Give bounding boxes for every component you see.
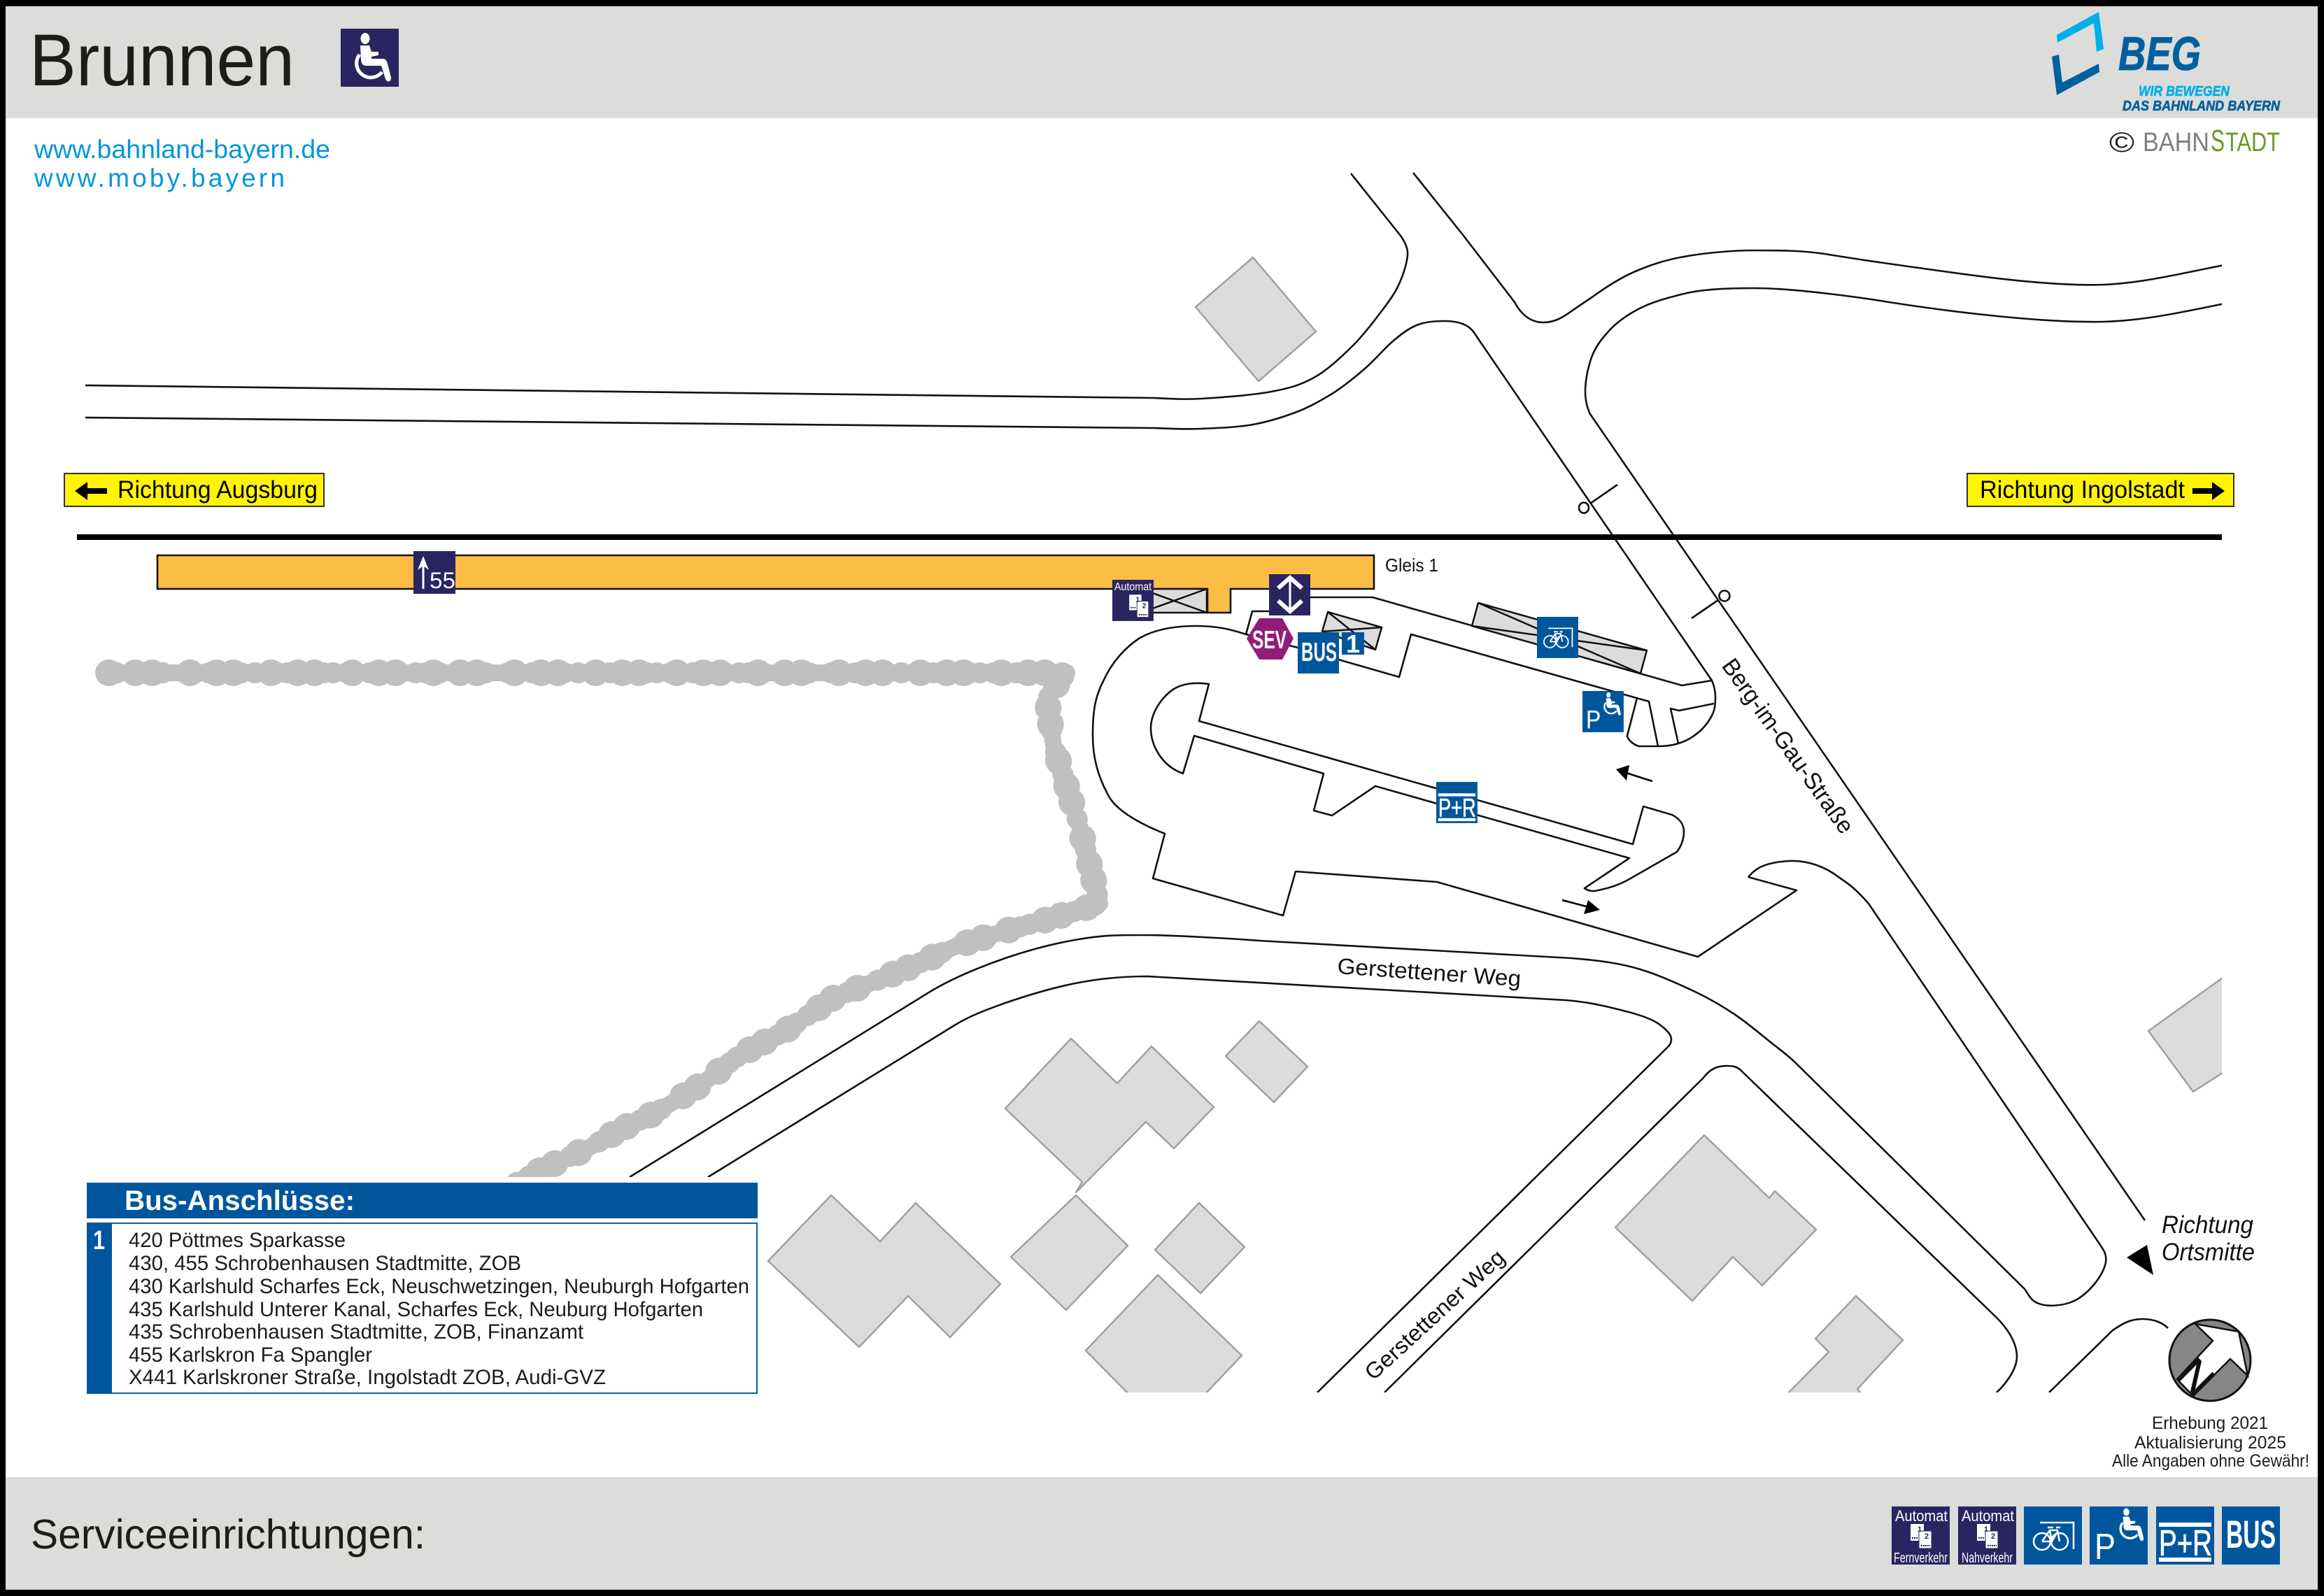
connection list: 1 <box>93 1226 105 1255</box>
sign: ticket machine: 2 <box>1142 603 1147 611</box>
sign: bike parking <box>1537 617 1578 658</box>
legend: park and ride: P+R <box>2159 1523 2212 1564</box>
survey note: Erhebung 2021 <box>2152 1413 2268 1433</box>
header band <box>6 6 2318 118</box>
logo: BEG <box>2052 12 2280 114</box>
title: Brunnen <box>29 20 295 101</box>
parking median island <box>1151 683 1684 891</box>
copyright BahnStadt: TADT <box>2225 128 2280 157</box>
connection list: 435 Schrobenhausen Stadtmitte, ZOB, Finanzamt <box>129 1320 584 1344</box>
legend: park and ride <box>2156 1506 2214 1565</box>
sign: platform length 55 <box>413 551 455 594</box>
legend: ticket machine local: 2 <box>1991 1532 1995 1541</box>
direction label: Richtung Ingolstadt <box>1967 473 2234 506</box>
roads <box>85 173 2225 1392</box>
bike shelter <box>1472 603 1647 674</box>
sign: SEV <box>1247 618 1294 660</box>
buildings <box>768 257 2225 1395</box>
legend: bike parking <box>2024 1506 2082 1565</box>
sign: SEV: SEV <box>1252 625 1287 654</box>
legend: ticket machine long distance: 1 <box>1918 1525 1922 1534</box>
logo: BEG: WIR BEWEGEN <box>2139 84 2230 99</box>
sign: ticket machine: Automat <box>1114 581 1152 593</box>
hedge <box>108 673 1100 1185</box>
map <box>85 173 2225 1395</box>
label: Berg-im-Gau-Straße: Berg-im-Gau-Straße <box>1716 654 1859 839</box>
footer band <box>6 1477 2318 1590</box>
sign: platform length 55: 55 <box>430 568 455 593</box>
legend: ticket machine long distance: Automat <box>1895 1507 1948 1525</box>
sign: disabled parking: P <box>1586 705 1601 734</box>
sign: bus stop 1 <box>1342 629 1364 658</box>
website links: www.moby.bayern <box>34 164 285 192</box>
sign: BUS: BUS <box>1301 638 1337 667</box>
label: Gleis 1: Gleis 1 <box>1385 555 1438 576</box>
legend: ticket machine long distance <box>1892 1506 1950 1566</box>
label: Gerstettener Weg lower: Gerstettener Weg <box>1359 1244 1510 1385</box>
logo: BEG: DAS BAHNLAND BAYERN <box>2123 99 2280 114</box>
website links <box>34 135 330 192</box>
copyright BahnStadt: S <box>2211 124 2225 158</box>
logo: BEG: BEG <box>2118 27 2201 80</box>
legend: bus <box>2222 1506 2280 1565</box>
legend: ticket machine long distance: Fernverkehr <box>1894 1551 1948 1566</box>
sign: BUS <box>1298 632 1339 674</box>
compass: N <box>2167 1349 2224 1406</box>
copyright BahnStadt <box>2109 124 2280 158</box>
sign: P+R: P+R <box>1438 794 1476 822</box>
arrow: parking flow left <box>1616 765 1652 781</box>
sign: ticket machine: 1 <box>1135 596 1140 604</box>
bus stop shelter <box>1322 612 1382 650</box>
label: Richtung Ortsmitte: Ortsmitte <box>2162 1239 2255 1266</box>
website links: www.bahnland-bayern.de <box>34 135 330 164</box>
platform shelter <box>1141 589 1207 613</box>
legend: ticket machine local: Automat <box>1962 1507 2014 1525</box>
survey note: Alle Angaben ohne Gewähr! <box>2112 1451 2309 1471</box>
panel heading <box>87 1183 758 1218</box>
connection list: 420 Pöttmes Sparkasse <box>129 1229 346 1252</box>
panel: bus connections <box>76 1177 765 1399</box>
label: Gerstettener Weg upper: Gerstettener Weg <box>1337 953 1522 991</box>
sign: disabled parking <box>1582 691 1624 734</box>
direction label: Richtung Ingolstadt: Richtung Ingolstadt <box>1980 476 2185 504</box>
copyright BahnStadt: © <box>2109 127 2134 158</box>
legend: disabled parking <box>2090 1506 2148 1567</box>
connection list: 455 Karlskron Fa Spangler <box>129 1344 372 1367</box>
arrow: parking flow right <box>1562 900 1600 914</box>
legend: ticket machine local: 1 <box>1984 1525 1988 1534</box>
arrow: Richtung Ortsmitte <box>2127 1245 2153 1275</box>
compass <box>2167 1320 2251 1406</box>
connection list <box>87 1223 757 1394</box>
connection list: 430 Karlshuld Scharfes Eck, Neuschwetzingen, Neuburgh Hofgarten <box>129 1275 749 1298</box>
direction label: Richtung Augsburg <box>64 473 324 506</box>
track <box>77 534 2222 540</box>
label: Richtung Ortsmitte: Richtung <box>2162 1211 2254 1239</box>
copyright BahnStadt: BAHN <box>2143 128 2209 157</box>
connection list: X441 Karlskroner Straße, Ingolstadt ZOB, Audi-GVZ <box>129 1366 606 1389</box>
sign: P+R <box>1436 782 1478 823</box>
label: Richtung Ortsmitte <box>2162 1211 2255 1266</box>
sign: ticket machine <box>1112 580 1154 621</box>
icon: wheelchair accessible <box>341 29 399 87</box>
survey note: Aktualisierung 2025 <box>2134 1433 2286 1453</box>
survey note <box>2112 1413 2309 1471</box>
sign: stairs / lift <box>1269 574 1310 615</box>
legend: bus: BUS <box>2226 1512 2276 1556</box>
legend: ticket machine local <box>1958 1506 2016 1566</box>
sign posts <box>1579 485 1729 618</box>
direction label: Richtung Augsburg: Richtung Augsburg <box>118 476 318 504</box>
legend: ticket machine local: Nahverkehr <box>1962 1551 2013 1566</box>
legend: ticket machine long distance: 2 <box>1925 1532 1929 1541</box>
connection list: 430, 455 Schrobenhausen Stadtmitte, ZOB <box>129 1252 521 1275</box>
footer heading: Serviceeinrichtungen: <box>31 1511 425 1558</box>
connection list: 435 Karlshuld Unterer Kanal, Scharfes Eck, Neuburg Hofgarten <box>129 1298 703 1321</box>
panel heading: Bus-Anschlüsse: <box>125 1185 355 1216</box>
sign: bus stop 1: 1 <box>1346 629 1360 658</box>
legend: disabled parking: P <box>2095 1527 2116 1567</box>
platform <box>157 555 1374 613</box>
